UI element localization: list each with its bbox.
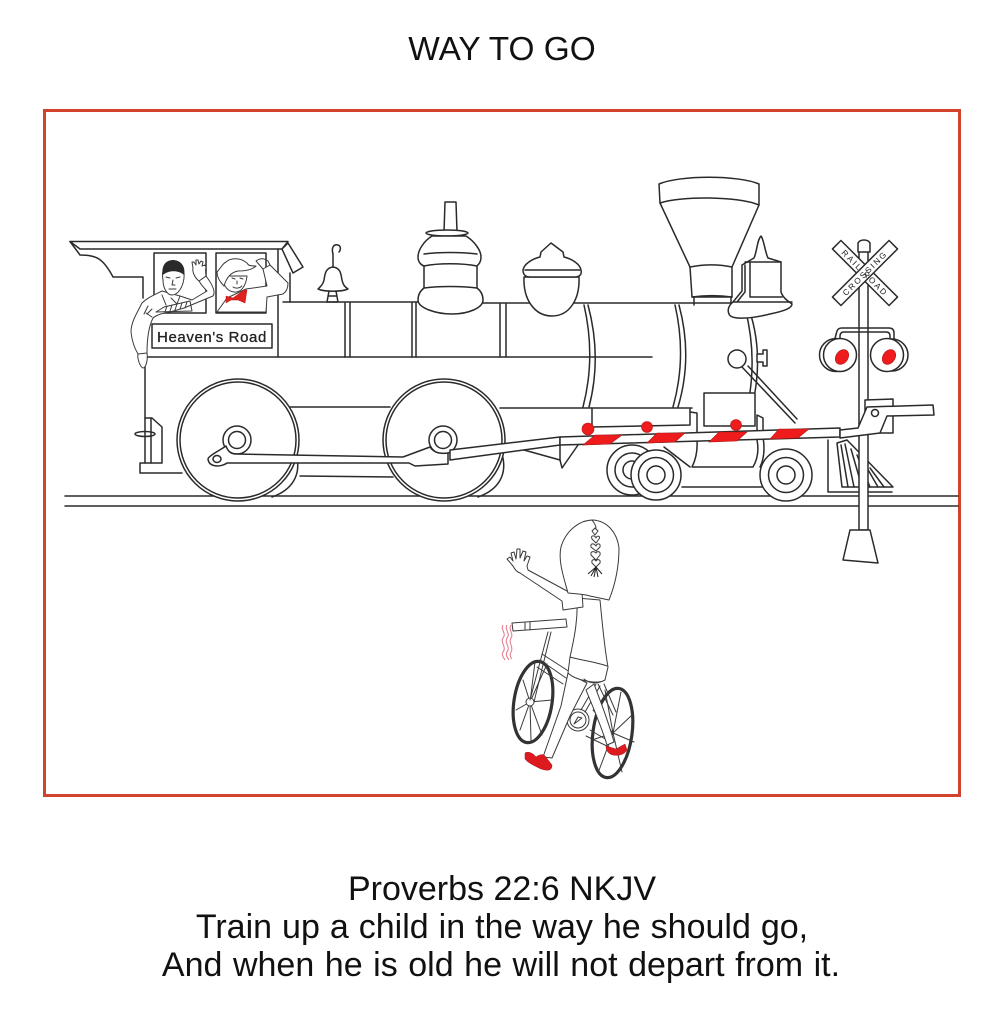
sand dome [523, 243, 581, 316]
railroad crossing signal [820, 240, 934, 563]
crossing gate arm [560, 428, 840, 445]
bell [318, 245, 348, 302]
box on running board [704, 393, 755, 426]
woman waving in cowboy hat [217, 259, 288, 312]
pink ribbons [502, 625, 512, 660]
illustration frame [44, 110, 960, 796]
signal post [843, 240, 878, 563]
knob and rod [728, 350, 797, 423]
rear driving wheel [177, 379, 299, 501]
verse reference: Proverbs 22:6 NKJV [348, 870, 656, 908]
crossbuck sign [832, 240, 898, 306]
signal bracket [834, 328, 894, 342]
gate counterweight [840, 399, 934, 438]
cab window left [154, 253, 206, 313]
engineer waving [131, 253, 272, 368]
smokestack [659, 177, 759, 305]
left signal light [820, 338, 856, 372]
nameplate [152, 324, 272, 348]
verse line one: Train up a child in the way he should go, [196, 908, 808, 946]
front truck wheels [607, 445, 812, 501]
headlamp [728, 236, 792, 318]
red shoes [525, 744, 627, 770]
cowcatcher [828, 440, 893, 492]
handlebar [512, 619, 567, 631]
man figure [131, 260, 214, 368]
girl on bicycle [502, 520, 638, 780]
girl legs [543, 673, 614, 758]
cab lower wall and step [135, 367, 182, 473]
bicycle frame [530, 632, 616, 747]
title: WAY TO GO [408, 31, 596, 68]
front driving wheel [383, 379, 505, 501]
girl torso and skirt [568, 598, 608, 683]
red gate stripes [583, 429, 809, 445]
cab roof [70, 242, 303, 357]
verse line two: And when he is old he will not depart from it. [162, 946, 840, 984]
right signal light [870, 338, 908, 372]
crossbuck sign: CROSSING [841, 249, 890, 298]
crossbuck sign: RAIL ROAD [840, 248, 890, 298]
crossing gate [560, 420, 840, 445]
steam dome [418, 202, 483, 314]
front bicycle wheel [508, 659, 558, 745]
red bandana [226, 290, 247, 303]
railway tracks [65, 496, 958, 506]
rear bicycle wheel [587, 686, 638, 780]
cylinder and smokebox [524, 408, 764, 487]
girl hair [560, 520, 619, 600]
cab window right [216, 253, 266, 313]
connecting rods [208, 437, 560, 466]
locomotive [70, 177, 893, 501]
nameplate: Heaven's Road [157, 329, 267, 346]
girl arm and hand [507, 549, 583, 610]
red gate lamps [582, 420, 742, 435]
braid tip [588, 567, 602, 577]
boiler [148, 302, 758, 477]
